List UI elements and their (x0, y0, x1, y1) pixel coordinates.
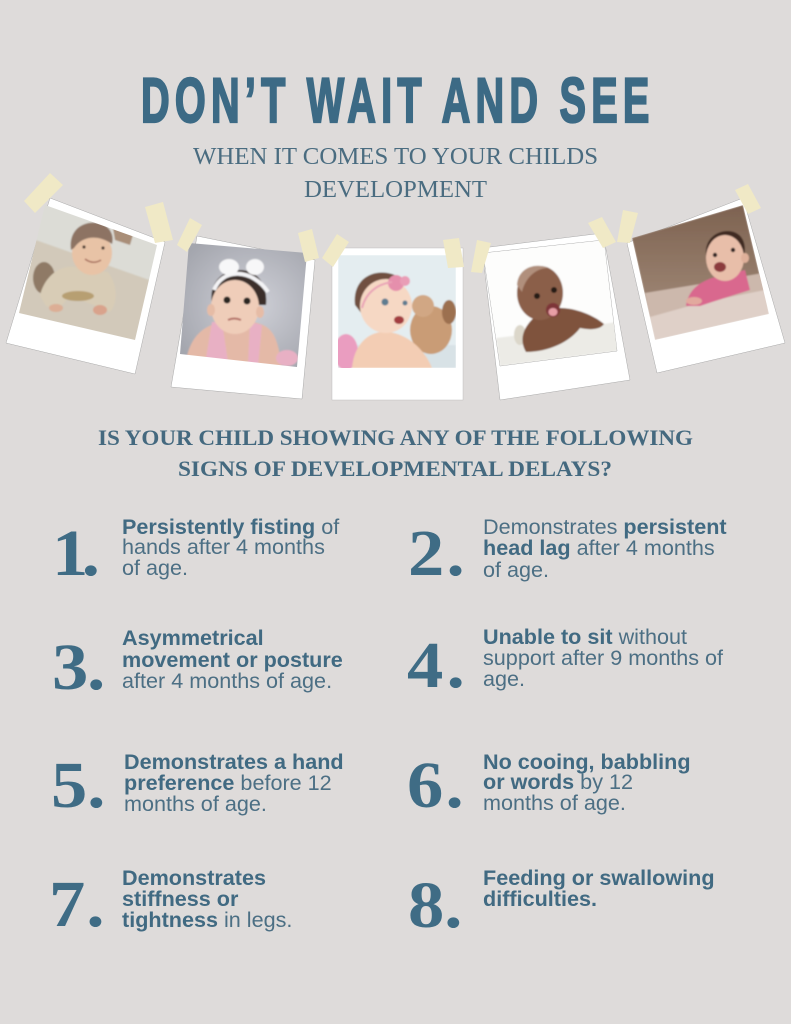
polaroid 1: baby in knit hat (6, 198, 170, 374)
sign 2: of age. (483, 557, 549, 582)
sign 5: months of age. (124, 791, 267, 816)
sign 2 (408, 514, 727, 590)
sign 1: hands after 4 months (122, 534, 325, 559)
polaroid photo strip (6, 173, 785, 400)
sign 5: 5. (51, 749, 105, 822)
polaroid 3: baby with pink headband and teddy (332, 248, 463, 400)
sign 1: 1. (52, 517, 100, 590)
title: DON’T WAIT AND SEE (141, 66, 649, 136)
subtitle: WHEN IT COMES TO YOUR CHILDS (193, 144, 598, 170)
sign 8: Feeding or swallowing (483, 865, 715, 890)
sign 6: or words by 12 (483, 769, 633, 794)
sign 8: 8. (408, 869, 462, 942)
question heading: SIGNS OF DEVELOPMENTAL DELAYS? (178, 456, 612, 481)
sign 7 (49, 865, 292, 941)
polaroid 2: baby with white bow (171, 236, 315, 399)
sign 3: movement or posture (122, 647, 343, 672)
sign 7: 7. (49, 868, 105, 941)
polaroid 5: baby in pink top on bed (627, 198, 785, 373)
polaroid 4: laughing baby on white blanket (482, 233, 630, 400)
sign 7: tightness in legs. (122, 907, 292, 932)
subtitle: DEVELOPMENT (304, 177, 487, 203)
sign 7: stiffness or (122, 886, 239, 911)
question heading (98, 425, 693, 481)
sign 3: after 4 months of age. (122, 668, 332, 693)
sign 6 (407, 749, 691, 822)
sign 4: 4. (407, 629, 465, 702)
washi tape pieces (24, 173, 761, 273)
sign 6: months of age. (483, 790, 626, 815)
sign 2: head lag after 4 months (483, 535, 715, 560)
sign 3 (52, 625, 343, 704)
sign 2: 2. (408, 517, 465, 590)
sign 1: of age. (122, 555, 188, 580)
sign 5 (51, 749, 344, 822)
sign 7: Demonstrates (122, 865, 266, 890)
sign 5: Demonstrates a hand (124, 749, 344, 774)
sign 6: No cooing, babbling (483, 749, 691, 774)
question heading: IS YOUR CHILD SHOWING ANY OF THE FOLLOWING (98, 425, 693, 450)
sign 4: Unable to sit without (483, 624, 687, 649)
sign 2: Demonstrates persistent (483, 514, 727, 539)
sign 3: Asymmetrical (122, 625, 264, 650)
sign 4 (407, 624, 724, 702)
sign 8 (408, 865, 715, 942)
sign 6: 6. (407, 749, 464, 822)
sign 4: support after 9 months of (483, 645, 724, 670)
sign 8: difficulties. (483, 886, 597, 911)
subtitle (193, 144, 598, 203)
sign 4: age. (483, 666, 525, 691)
sign 1: Persistently fisting of (122, 514, 340, 539)
sign 5: preference before 12 (124, 770, 332, 795)
sign 3: 3. (52, 631, 105, 704)
sign 1 (52, 514, 340, 590)
